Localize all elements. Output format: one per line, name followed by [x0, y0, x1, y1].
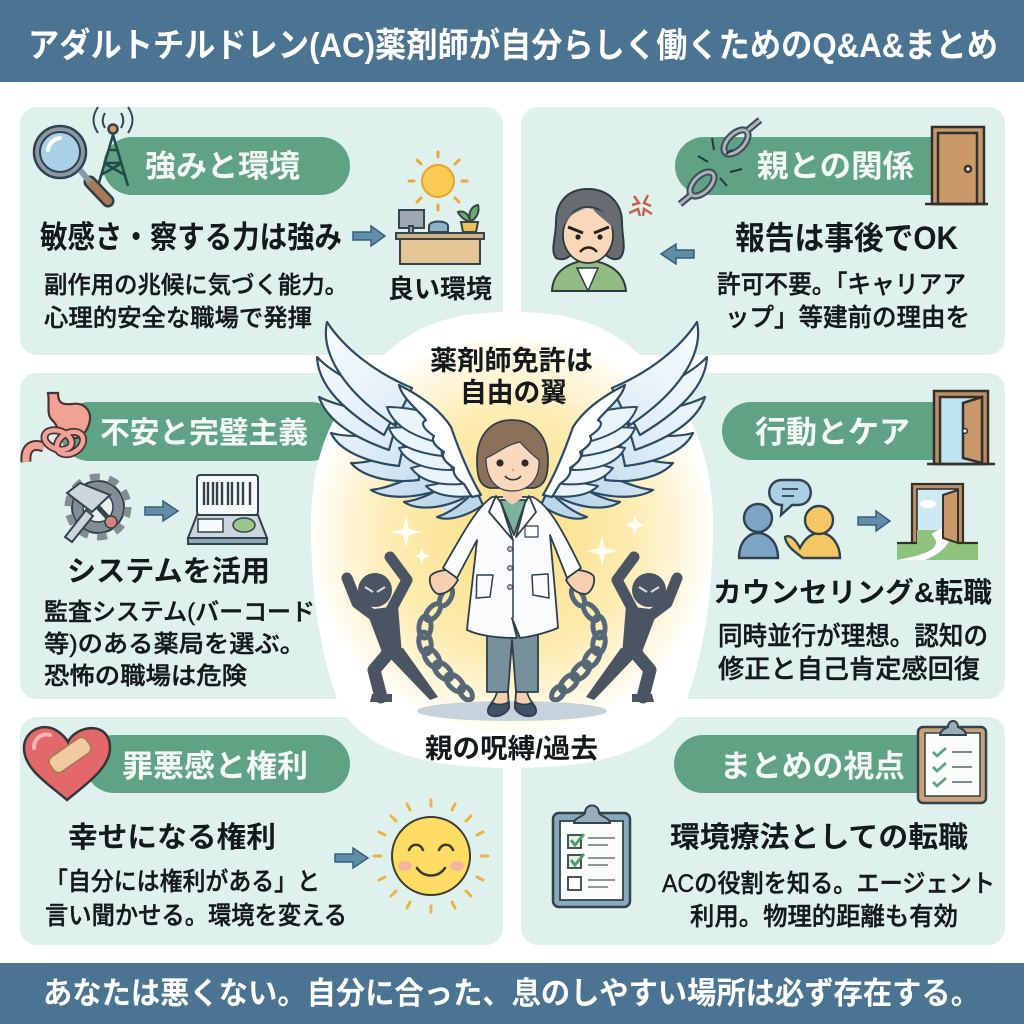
- white halo: [311, 312, 713, 768]
- text block: ACの役割を知る。エージェント: [662, 870, 995, 898]
- pharmacist figure: [430, 420, 594, 716]
- panel: 不安と完璧主義: [20, 373, 503, 699]
- facial features: [496, 459, 529, 471]
- label: 良い環境: 良い環境: [388, 274, 492, 304]
- heading: システムを活用: システムを活用: [67, 555, 270, 588]
- text block: [45, 868, 347, 930]
- footer message: あなたは悪くない。自分に合った、息のしやすい場所は必ず存在する。: [43, 976, 980, 1011]
- pill heading: 不安と完璧主義: 不安と完璧主義: [100, 417, 308, 450]
- broken chain left: [417, 586, 475, 702]
- pill heading: 強みと環境: 強みと環境: [145, 149, 300, 184]
- heading: 幸せになる権利: 幸せになる権利: [68, 821, 276, 854]
- text block: [662, 870, 995, 931]
- icon: door to path: [897, 484, 978, 560]
- text block: [718, 621, 988, 684]
- text block: 恐怖の職場は危険: [44, 663, 247, 690]
- pill heading: まとめの視点: まとめの視点: [720, 749, 905, 784]
- icon: knotted stomach: [26, 393, 90, 462]
- icon: open door: [927, 391, 995, 464]
- arrow: [145, 501, 178, 521]
- icon: heart with bandage: [24, 727, 110, 800]
- central text: 薬剤師免許は: [430, 346, 593, 376]
- pill heading: 罪悪感と権利: [85, 735, 350, 793]
- text block: ップ」等建前の理由を: [725, 304, 970, 332]
- central text: [430, 346, 593, 408]
- shadow figure right: [586, 557, 677, 702]
- pill heading: 罪悪感と権利: 罪悪感と権利: [122, 749, 308, 784]
- text block: 副作用の兆候に気づく能力。: [44, 272, 348, 299]
- icon: broken chain: [680, 120, 760, 204]
- collar: [489, 496, 536, 540]
- icon: smiling sun: [374, 800, 488, 912]
- heading: 報告は事後でOK: 報告は事後でOK: [735, 220, 958, 256]
- icon: magnifying glass: [34, 126, 108, 201]
- green undershirt: [500, 500, 526, 535]
- central text: 自由の翼: [460, 378, 567, 408]
- pill heading: 行動とケア: 行動とケア: [755, 415, 910, 450]
- footer bar: [0, 963, 1024, 1024]
- ground shadow: [417, 701, 607, 721]
- pill heading: まとめの視点: [674, 735, 925, 793]
- icon: sun: [409, 152, 467, 210]
- icon: anger mark: [629, 195, 652, 216]
- pill heading: 不安と完璧主義: [60, 402, 340, 461]
- arrow: [661, 244, 694, 264]
- pill heading: 強みと環境: [103, 137, 350, 195]
- label: 親の呪縛/過去: 親の呪縛/過去: [425, 734, 598, 764]
- heading: 敏感さ・察する力は強み: 敏感さ・察する力は強み: [40, 220, 342, 255]
- text block: 許可不要。「キャリアア: [717, 271, 966, 299]
- coat details: [476, 540, 549, 618]
- panel: 親との関係: [521, 107, 1005, 355]
- panel: 行動とケア: [521, 373, 1005, 699]
- icon: two people talking: [739, 480, 840, 558]
- icon: gear and hammer: [65, 477, 128, 542]
- heading: カウンセリング&転職: カウンセリング&転職: [713, 576, 992, 608]
- broken chain right: [549, 586, 607, 702]
- arrow: [858, 511, 890, 531]
- pill heading: 行動とケア: [722, 402, 940, 460]
- header bar: [0, 0, 1024, 82]
- pill heading: 親との関係: [675, 137, 935, 195]
- text block: [717, 271, 970, 332]
- icon: right wing: [541, 322, 707, 519]
- yellow glow: [314, 337, 710, 733]
- text block: 等)のある薬局を選ぶ。: [44, 631, 305, 658]
- center illustration: [311, 312, 713, 768]
- panel: まとめの視点: [521, 717, 1005, 945]
- icon: checklist: [553, 806, 630, 907]
- panel: 強みと環境: [20, 107, 503, 355]
- text block: 心理的安全な職場で発揮: [44, 305, 312, 332]
- icon: angry woman: [552, 189, 626, 291]
- icon: clipboard top right: [918, 721, 986, 803]
- icon: door: [925, 127, 988, 204]
- icon: radio tower: [94, 107, 132, 186]
- text block: [44, 599, 315, 690]
- icon: desk with plant: [396, 205, 484, 264]
- icon: left wing: [317, 322, 483, 519]
- hands: [430, 570, 594, 594]
- feet and shoes: [488, 692, 536, 716]
- hair back: [477, 420, 548, 488]
- text block: 同時並行が理想。認知の: [718, 621, 988, 651]
- icon: barcode terminal: [188, 475, 267, 544]
- arrow: [335, 848, 368, 868]
- text block: 「自分には権利がある」と: [45, 868, 320, 896]
- shadow figure left: [347, 557, 438, 702]
- neck: [503, 486, 522, 505]
- arrow: [353, 226, 385, 246]
- text block: 利用。物理的距離も有効: [690, 903, 958, 931]
- panel: 罪悪感と権利: [20, 717, 503, 945]
- face: [486, 442, 539, 491]
- lab coat: [443, 497, 581, 638]
- sparkles: [390, 514, 645, 566]
- text block: [44, 272, 348, 332]
- text block: 修正と自己肯定感回復: [718, 654, 980, 684]
- heading: 環境療法としての転職: 環境療法としての転職: [670, 821, 968, 854]
- text block: 監査システム(バーコード: [44, 599, 315, 626]
- trousers: [487, 628, 538, 692]
- pill heading: 親との関係: 親との関係: [757, 149, 914, 184]
- text block: 言い聞かせる。環境を変える: [45, 902, 347, 930]
